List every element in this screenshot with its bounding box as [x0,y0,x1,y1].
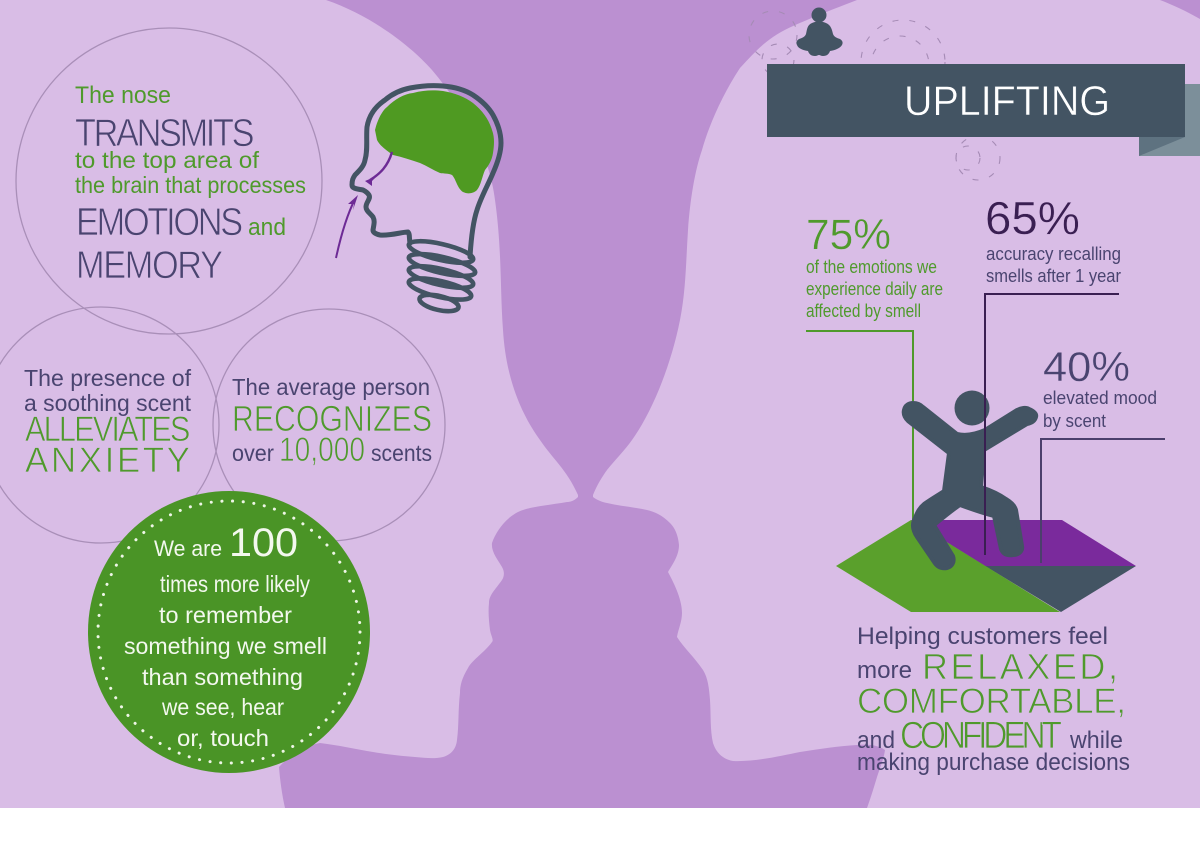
icon: meditating figure [796,8,843,56]
icon: jumping person [904,390,1036,568]
stat: 75 percent: 75% [806,211,891,259]
text block: helping customers: making purchase decisions [857,749,1130,776]
panel: nose transmits circle: the brain that processes [75,172,306,198]
stat: 40 percent [1043,343,1157,431]
panel: recognizes scents circle: over [232,440,274,466]
panel: recognizes scents circle: 10,000 [279,431,365,469]
stat: 40 percent: by scent [1043,411,1106,431]
icon: head in light bulb [336,86,501,314]
panel: green memory circle: 100 [229,521,298,565]
panel: green memory circle: or, touch [177,725,269,751]
text block: helping customers: COMFORTABLE, [857,682,1126,721]
panel: green memory circle: we see, hear [161,694,284,720]
panel: recognizes scents circle: The average person [232,374,430,400]
panel: green memory circle: We are [154,536,222,561]
stat: 75 percent: of the emotions we [806,257,937,277]
panel: recognizes scents circle: scents [371,440,432,466]
decorative dashed scent rings [749,11,1000,180]
hexagon platform [836,520,1136,612]
panel: green memory circle: to remember [159,602,292,628]
text block: helping customers: more [857,657,912,684]
banner fold [1139,84,1200,156]
stat: 40 percent: elevated mood [1043,388,1157,408]
panel: recognizes scents circle [213,309,445,541]
leader line: 75 percent [806,331,913,522]
negative space vase silhouette between two faces [279,0,885,808]
text block: helping customers: while [1069,727,1123,754]
panel: nose transmits circle: EMOTIONS [76,200,243,243]
panel: nose transmits circle: TRANSMITS [75,111,255,154]
panel: soothing scent circle [0,307,219,543]
stat: 75 percent: affected by smell [806,301,921,321]
panel: nose transmits circle [16,28,322,334]
panel: green memory circle: times more likely [160,571,310,597]
stat: 75 percent [806,211,943,321]
banner: UPLIFTING heading: UPLIFTING [904,77,1110,124]
panel: soothing scent circle: ANXIETY [25,441,190,480]
panel: soothing scent circle: ALLEVIATES [25,409,190,448]
panel: soothing scent circle: a soothing scent [24,390,192,416]
panel: nose transmits circle: and [248,214,286,241]
top right corner of dark background [1160,0,1200,19]
stat: 75 percent: experience daily are [806,279,943,299]
text block: helping customers [857,623,1130,776]
stat: 40 percent: 40% [1043,343,1130,390]
panel: green memory circle: than something [142,664,303,690]
panel: soothing scent circle: The presence of [24,365,192,391]
leader line: 65 percent [985,294,1119,555]
stat: 65 percent: accuracy recalling [986,244,1121,264]
text block: helping customers: and [857,727,895,754]
text block: helping customers: Helping customers feel [857,623,1108,650]
text block: helping customers: CONFIDENT [900,714,1062,756]
panel: green memory circle: something we smell [124,633,327,659]
panel: nose transmits circle: to the top area of [75,147,260,173]
panel: nose transmits circle: The nose [75,82,171,109]
leader line: 40 percent [1041,439,1165,563]
panel: nose transmits circle: MEMORY [76,243,223,286]
stat: 65 percent [985,192,1121,286]
stat: 65 percent: 65% [985,192,1080,244]
stat: 65 percent: smells after 1 year [986,266,1121,286]
panel: green memory circle [88,491,370,773]
banner: UPLIFTING heading [767,64,1185,137]
panel: recognizes scents circle: RECOGNIZES [232,398,432,439]
text block: helping customers: RELAXED, [922,646,1118,687]
